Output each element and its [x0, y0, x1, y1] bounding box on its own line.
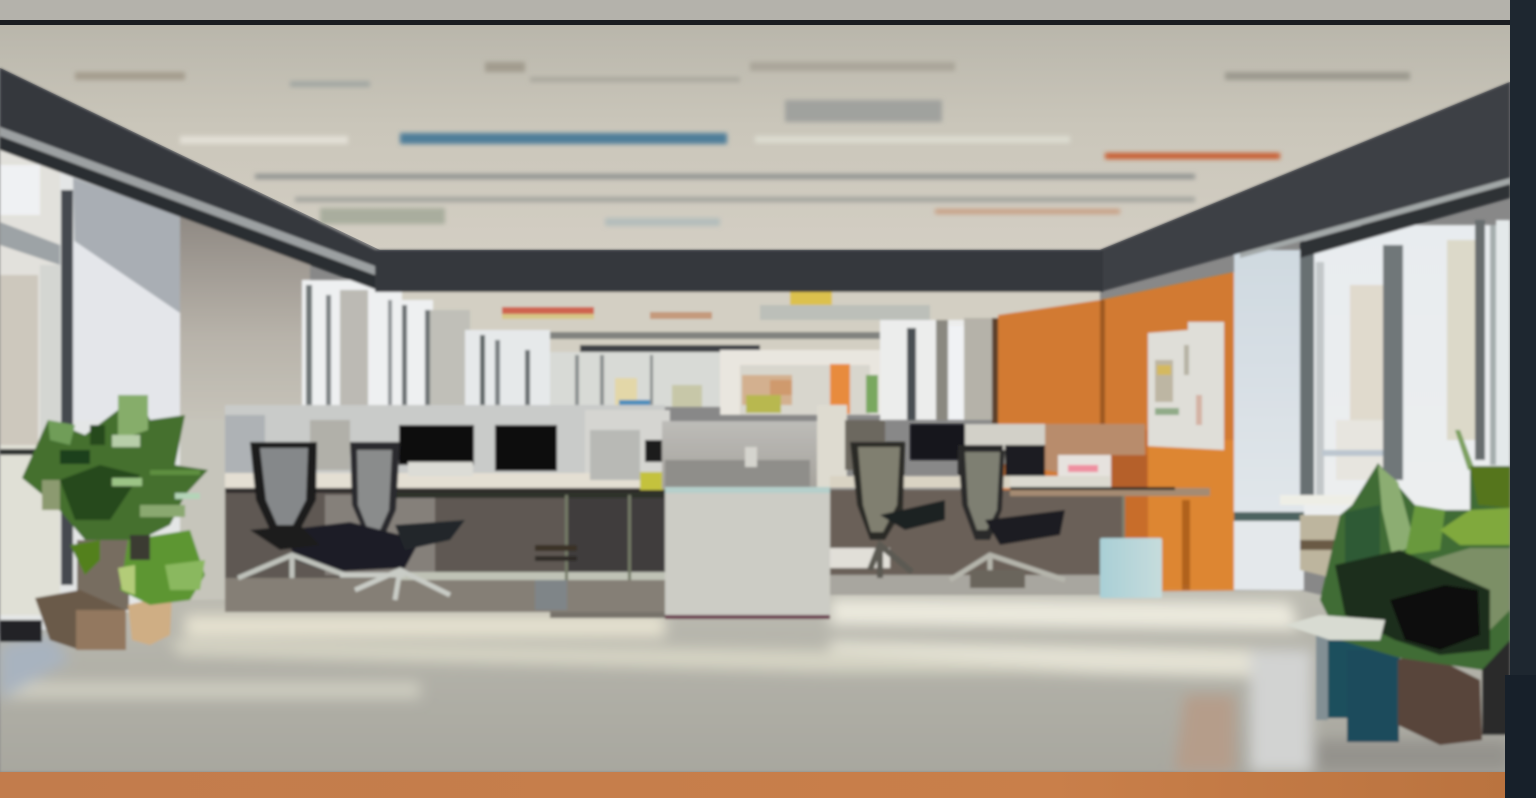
left window view: [0, 150, 60, 615]
monitors: [910, 424, 1045, 477]
waste bin: [1100, 538, 1162, 598]
top strip above ceiling: [0, 0, 1536, 25]
right plant pots: [1316, 630, 1510, 745]
desk legs and rail: [395, 492, 665, 610]
far room: [302, 280, 1100, 450]
office chairs right: [850, 442, 1065, 588]
chair back 1: [250, 442, 317, 530]
central cabinet: [662, 421, 830, 619]
ceiling: [0, 25, 1510, 250]
orange wall: [998, 272, 1234, 592]
right ceiling beam: [1100, 82, 1510, 292]
partitions: [960, 424, 1050, 464]
ceiling light strips: [75, 62, 1410, 226]
bottom orange band: [0, 772, 1505, 798]
chair bases: [238, 555, 345, 578]
far right glazing: [880, 318, 999, 428]
desk area left: [225, 405, 670, 618]
central ceiling beam: [375, 250, 1103, 292]
pink-label box: [1058, 455, 1111, 487]
office chairs left: [238, 442, 465, 600]
chair back 2: [350, 442, 400, 535]
left plant foliage: [22, 395, 208, 605]
right window wall: [1234, 220, 1510, 590]
floor: [0, 590, 1510, 772]
pinned poster: [1148, 322, 1224, 450]
desktop: [830, 476, 1010, 488]
seats and arms: [285, 522, 420, 572]
far end wall: [720, 350, 910, 415]
left plant: [22, 395, 208, 650]
monitors: [310, 420, 663, 471]
far left windows: [302, 280, 720, 450]
far ceiling: [380, 290, 1100, 353]
right plant foliage: [1285, 430, 1510, 670]
left plant pots: [35, 540, 172, 650]
left wall and windows: [0, 130, 310, 630]
left ceiling beam: [0, 68, 380, 291]
desktop: [225, 473, 665, 490]
desk partitions: [225, 405, 670, 482]
right dark pillar: [1505, 0, 1536, 798]
desk area right: [817, 405, 1210, 595]
right plant: [1285, 430, 1510, 745]
